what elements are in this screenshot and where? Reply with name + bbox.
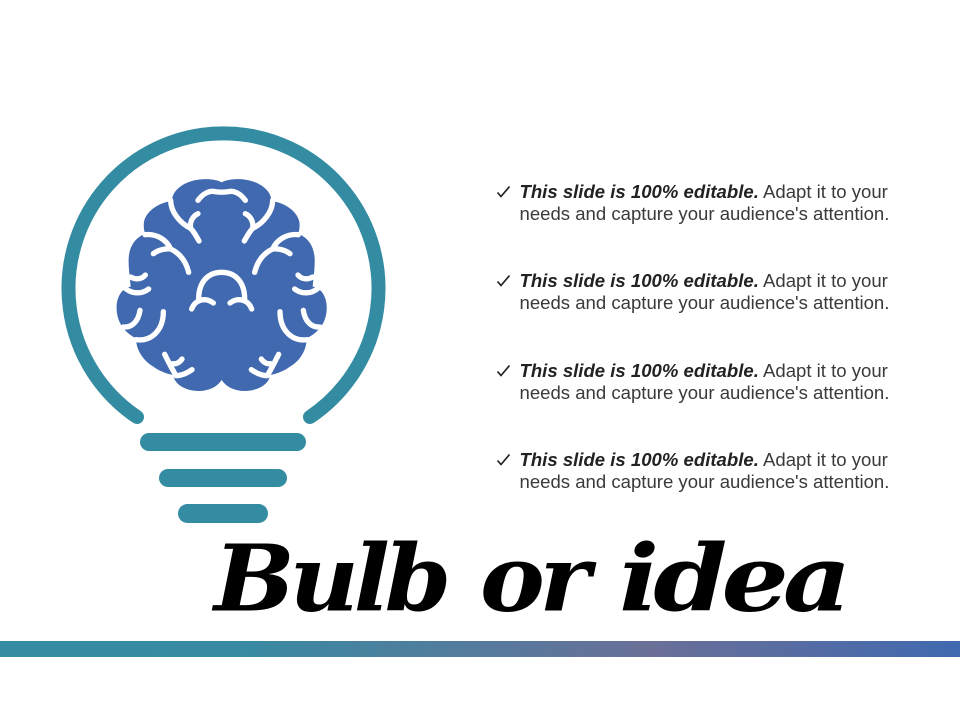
- text block: bullet 3: needs and capture your audience's attention.: [520, 382, 889, 403]
- bulb base bars: [140, 433, 306, 523]
- title: [212, 525, 846, 632]
- title: or: [480, 525, 585, 632]
- text block: bullet 1: This slide is 100% editable. Adapt it to your: [520, 180, 888, 202]
- text block: bullet 2: needs and capture your audience's attention.: [520, 292, 889, 313]
- gradient footer bar: [0, 641, 960, 657]
- icon: brain: [117, 179, 327, 391]
- text block: bullet 2: This slide is 100% editable. Adapt it to your: [520, 270, 888, 291]
- text block: bullet 2: [496, 270, 889, 313]
- text block: bullet 1: needs and capture your audience's attention.: [520, 203, 889, 224]
- text block: bullet 3: [496, 360, 889, 403]
- text block: bullet 4: This slide is 100% editable. Adapt it to your: [520, 449, 888, 470]
- text block: bullet 1: [496, 180, 889, 224]
- title: idea: [619, 525, 846, 632]
- text block: bullet 4: [496, 449, 889, 492]
- text block: bullet 4: needs and capture your audience's attention.: [520, 471, 889, 492]
- title: Bulb: [214, 525, 446, 632]
- bulb outline arc: [68, 133, 378, 417]
- text block: bullet 3: This slide is 100% editable. Adapt it to your: [520, 360, 888, 380]
